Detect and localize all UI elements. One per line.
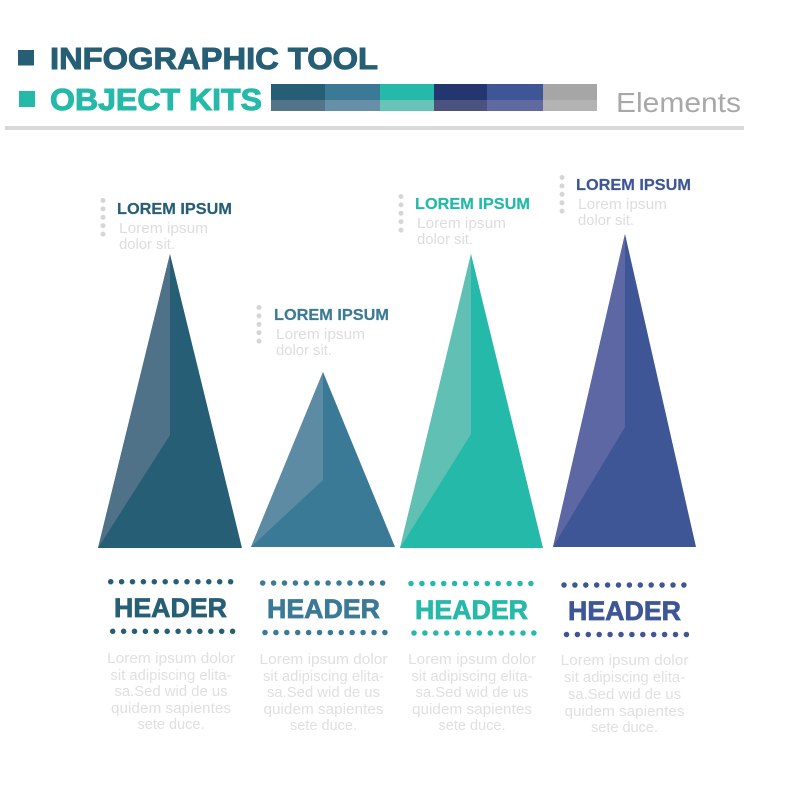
- callout 3: Lorem ipsum: [417, 215, 506, 232]
- triangle 1: [98, 254, 242, 548]
- callout 2: dolor sit.: [276, 342, 332, 359]
- callout 1: [103, 200, 232, 253]
- body text 1: quidem sapientes: [111, 701, 231, 717]
- header block 2: HEADER: [267, 594, 380, 624]
- colour palette bar: [271, 84, 597, 111]
- body text 3: sit adipiscing elita-: [412, 669, 533, 685]
- body text 1: [107, 651, 235, 733]
- body text 2: sit adipiscing elita-: [263, 669, 384, 685]
- body text 2: sete duce.: [290, 718, 357, 734]
- body text 2: [260, 652, 388, 734]
- callout 4: dolor sit.: [578, 212, 634, 229]
- callout 2: LOREM IPSUM: [274, 307, 389, 324]
- body text 4: [560, 653, 689, 736]
- callout 1: Lorem ipsum: [119, 220, 208, 237]
- callout 4: LOREM IPSUM: [576, 177, 691, 194]
- header block 4: [564, 585, 688, 634]
- title line: object kits: OBJECT KITS: [50, 82, 262, 117]
- body text 4: sa.Sed wid de us: [568, 687, 681, 703]
- elements label: Elements: [616, 87, 741, 118]
- body text 2: Lorem ipsum dolor: [260, 652, 388, 668]
- body text 1: sete duce.: [138, 717, 204, 733]
- body text 4: sit adipiscing elita-: [564, 670, 685, 686]
- triangle 4: [553, 234, 696, 547]
- triangle 3: [400, 254, 543, 548]
- callout 2: [259, 307, 389, 359]
- callout 1: dolor sit.: [119, 236, 175, 253]
- icon: dark square bullet: [18, 50, 34, 66]
- callout 3: [401, 196, 530, 248]
- header block 1: HEADER: [114, 593, 227, 623]
- triangle 2: [251, 372, 395, 547]
- callout 1: LOREM IPSUM: [117, 201, 232, 218]
- title line: infographic tool: INFOGRAPHIC TOOL: [50, 41, 378, 76]
- body text 1: Lorem ipsum dolor: [107, 651, 235, 667]
- body text 3: sa.Sed wid de us: [416, 685, 528, 701]
- header block 4: HEADER: [568, 596, 681, 626]
- body text 3: [408, 652, 536, 734]
- body text 3: sete duce.: [438, 718, 506, 734]
- body text 1: sa.Sed wid de us: [114, 684, 228, 700]
- body text 1: sit adipiscing elita-: [110, 668, 232, 684]
- callout 4: Lorem ipsum: [578, 196, 667, 213]
- body text 2: quidem sapientes: [264, 702, 384, 718]
- header block 2: [263, 583, 386, 632]
- body text 3: quidem sapientes: [412, 702, 532, 718]
- title block: [18, 41, 378, 117]
- body text 2: sa.Sed wid de us: [267, 685, 380, 701]
- callout 3: LOREM IPSUM: [415, 196, 530, 213]
- callout 3: dolor sit.: [417, 231, 473, 248]
- header block 1: [111, 582, 234, 631]
- body text 4: quidem sapientes: [564, 704, 684, 720]
- callout 2: Lorem ipsum: [276, 326, 365, 343]
- body text 4: Lorem ipsum dolor: [560, 653, 689, 669]
- header block 3: [411, 584, 535, 633]
- callout 4: [562, 177, 691, 229]
- body text 4: sete duce.: [591, 720, 658, 736]
- icon: teal square bullet: [19, 91, 35, 107]
- body text 3: Lorem ipsum dolor: [408, 652, 536, 668]
- header block 3: HEADER: [415, 595, 528, 625]
